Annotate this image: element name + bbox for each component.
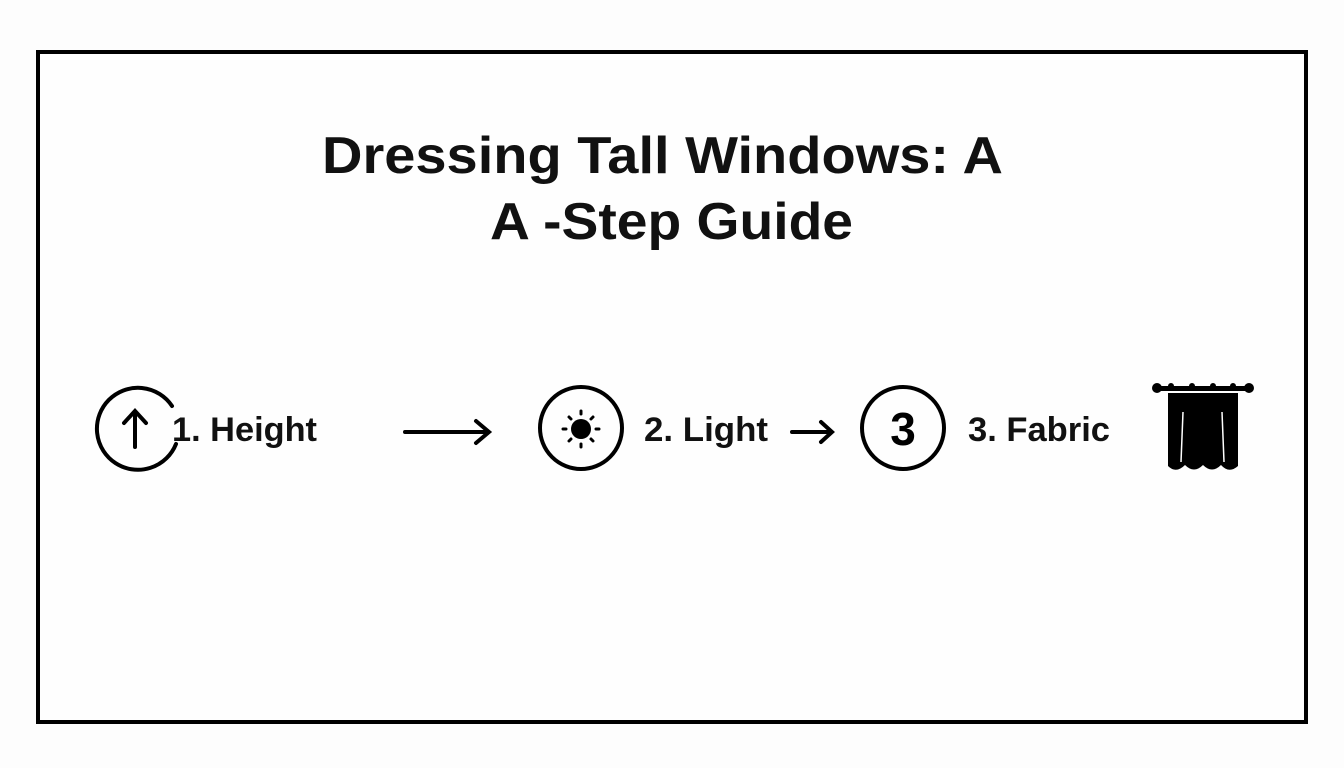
icon: curtain: [1152, 383, 1254, 470]
arrow 1: [405, 421, 489, 443]
title: Dressing Tall Windows: A: [322, 127, 1003, 185]
step 3: fabric: [862, 387, 1110, 469]
icon: up arrow circle: [97, 388, 176, 470]
arrow 2: [792, 422, 832, 442]
label: 3. Fabric: 3. Fabric: [968, 411, 1110, 449]
icon: number 3 circle: [862, 387, 944, 469]
step 1: height: [97, 388, 317, 470]
icon: number 3 circle: 3: [890, 403, 916, 455]
icon: sun circle: [540, 387, 622, 469]
title: [322, 127, 1003, 251]
title: A -Step Guide: [490, 193, 853, 251]
step 2: light: [540, 387, 768, 469]
label: 1. Height: 1. Height: [172, 411, 317, 449]
label: 2. Light: 2. Light: [644, 411, 768, 449]
